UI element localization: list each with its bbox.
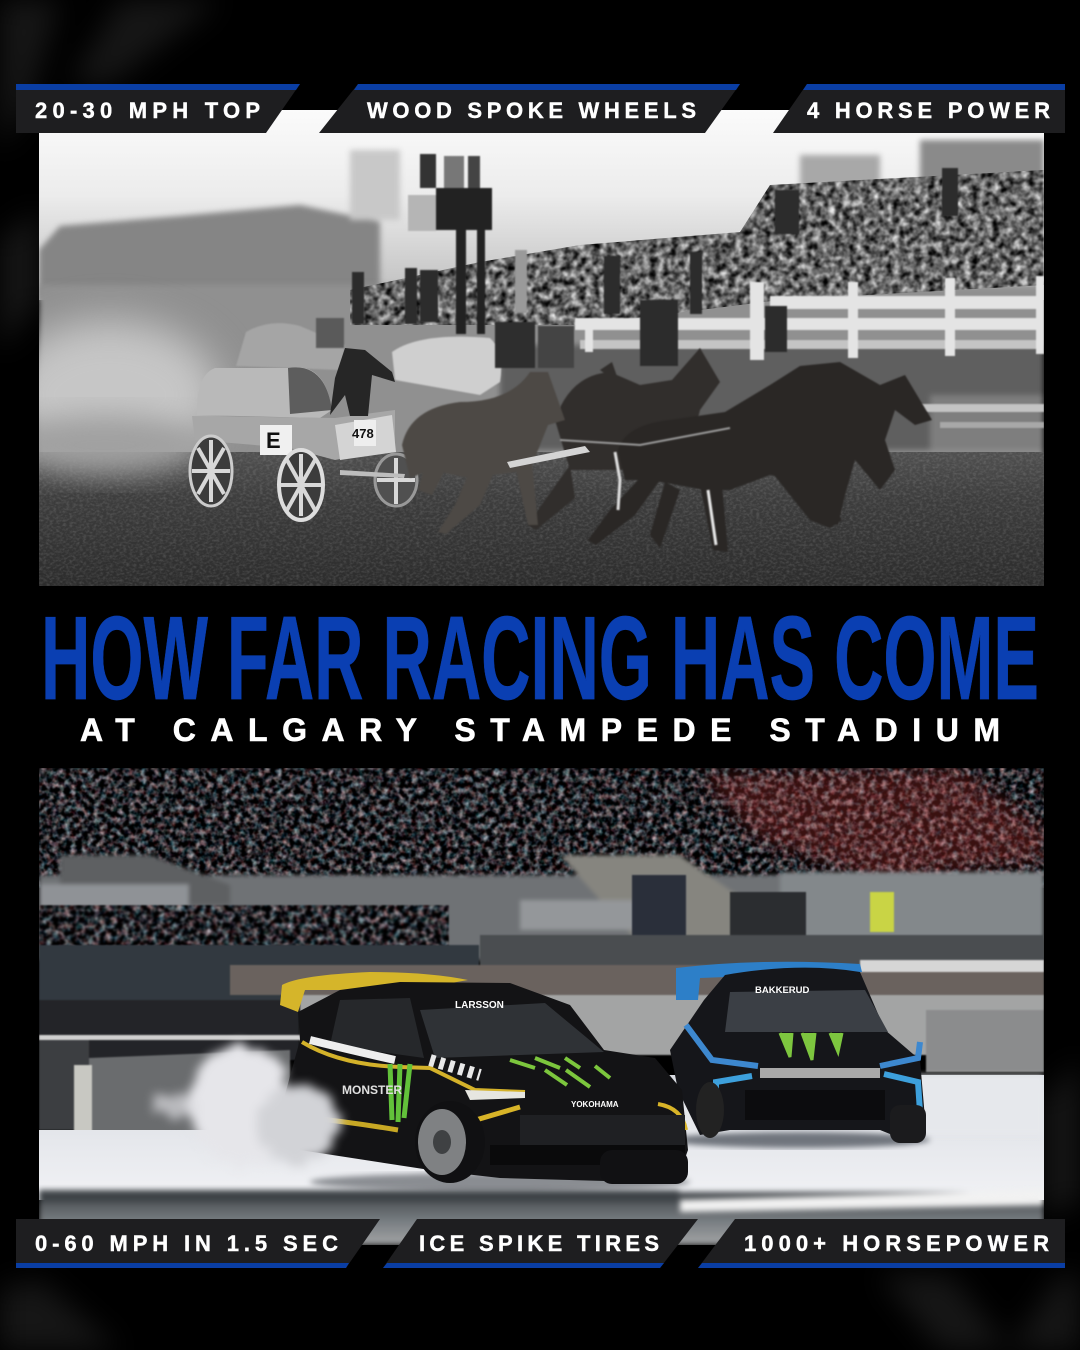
car: Larsson yellow <box>278 972 690 1191</box>
tag: wood spoke wheels: WOOD SPOKE WHEELS <box>367 98 696 123</box>
snow spray <box>149 1045 338 1165</box>
car: Bakkerud blue: BAKKERUD <box>755 985 810 996</box>
car: Larsson yellow: LARSSON <box>455 1000 504 1011</box>
car: Larsson yellow: YOKOHAMA <box>571 1100 619 1109</box>
tag: wood spoke wheels <box>319 84 740 133</box>
infield and track <box>39 285 1044 460</box>
horses: lead team <box>560 362 932 552</box>
sky <box>39 110 1044 300</box>
dirt ground <box>39 452 1044 586</box>
tag: 0-60 mph: 0-60 MPH IN 1.5 SEC <box>35 1231 338 1256</box>
dust cloud <box>39 302 232 452</box>
car wheel <box>418 1109 480 1183</box>
horses: middle team <box>528 348 720 530</box>
tag: 0-60 mph <box>16 1219 380 1268</box>
tag: 20-30 MPH TOP <box>16 84 300 133</box>
concourse level <box>39 855 1044 960</box>
subtitle: AT CALGARY STAMPEDE STADIUM <box>80 712 1000 748</box>
grandstand crowd <box>39 768 1044 888</box>
front wagon with driver: 478 <box>352 426 374 441</box>
car: Larsson yellow: MONSTER <box>342 1083 402 1097</box>
grandstand crowd <box>350 165 1044 330</box>
tag: 4 horse power: 4 HORSE POWER <box>807 98 1050 123</box>
tag: ice spike tires <box>383 1219 698 1268</box>
wagon tongue <box>340 446 590 478</box>
front wagon with driver: E <box>266 428 281 453</box>
tag: 4 horse power <box>773 84 1065 133</box>
snow track <box>39 1075 1044 1200</box>
front wagon with driver <box>190 348 417 520</box>
barriers <box>39 935 1044 1145</box>
white fence <box>575 276 1044 428</box>
tag: 20-30 MPH TOP: 20-30 MPH TOP <box>35 98 260 123</box>
distant buildings <box>39 140 1044 300</box>
standing spectators at rail <box>352 168 958 366</box>
tag: ice spike tires: ICE SPIKE TIRES <box>419 1231 659 1256</box>
photo: modern rallycross race on ice <box>39 768 1044 1245</box>
lower spectators <box>39 875 894 950</box>
blurred foreground strip <box>39 1190 1044 1245</box>
judges tower <box>408 154 492 334</box>
wagon wheels <box>190 436 417 520</box>
photo: historic chuckwagon race <box>0 110 1044 586</box>
tag: 1000+ horsepower: 1000+ HORSEPOWER <box>744 1231 1049 1256</box>
rear wagons <box>236 318 574 395</box>
horses: rear team <box>402 372 565 534</box>
car: Bakkerud blue <box>670 962 930 1148</box>
tag: 1000+ horsepower <box>698 1219 1065 1268</box>
